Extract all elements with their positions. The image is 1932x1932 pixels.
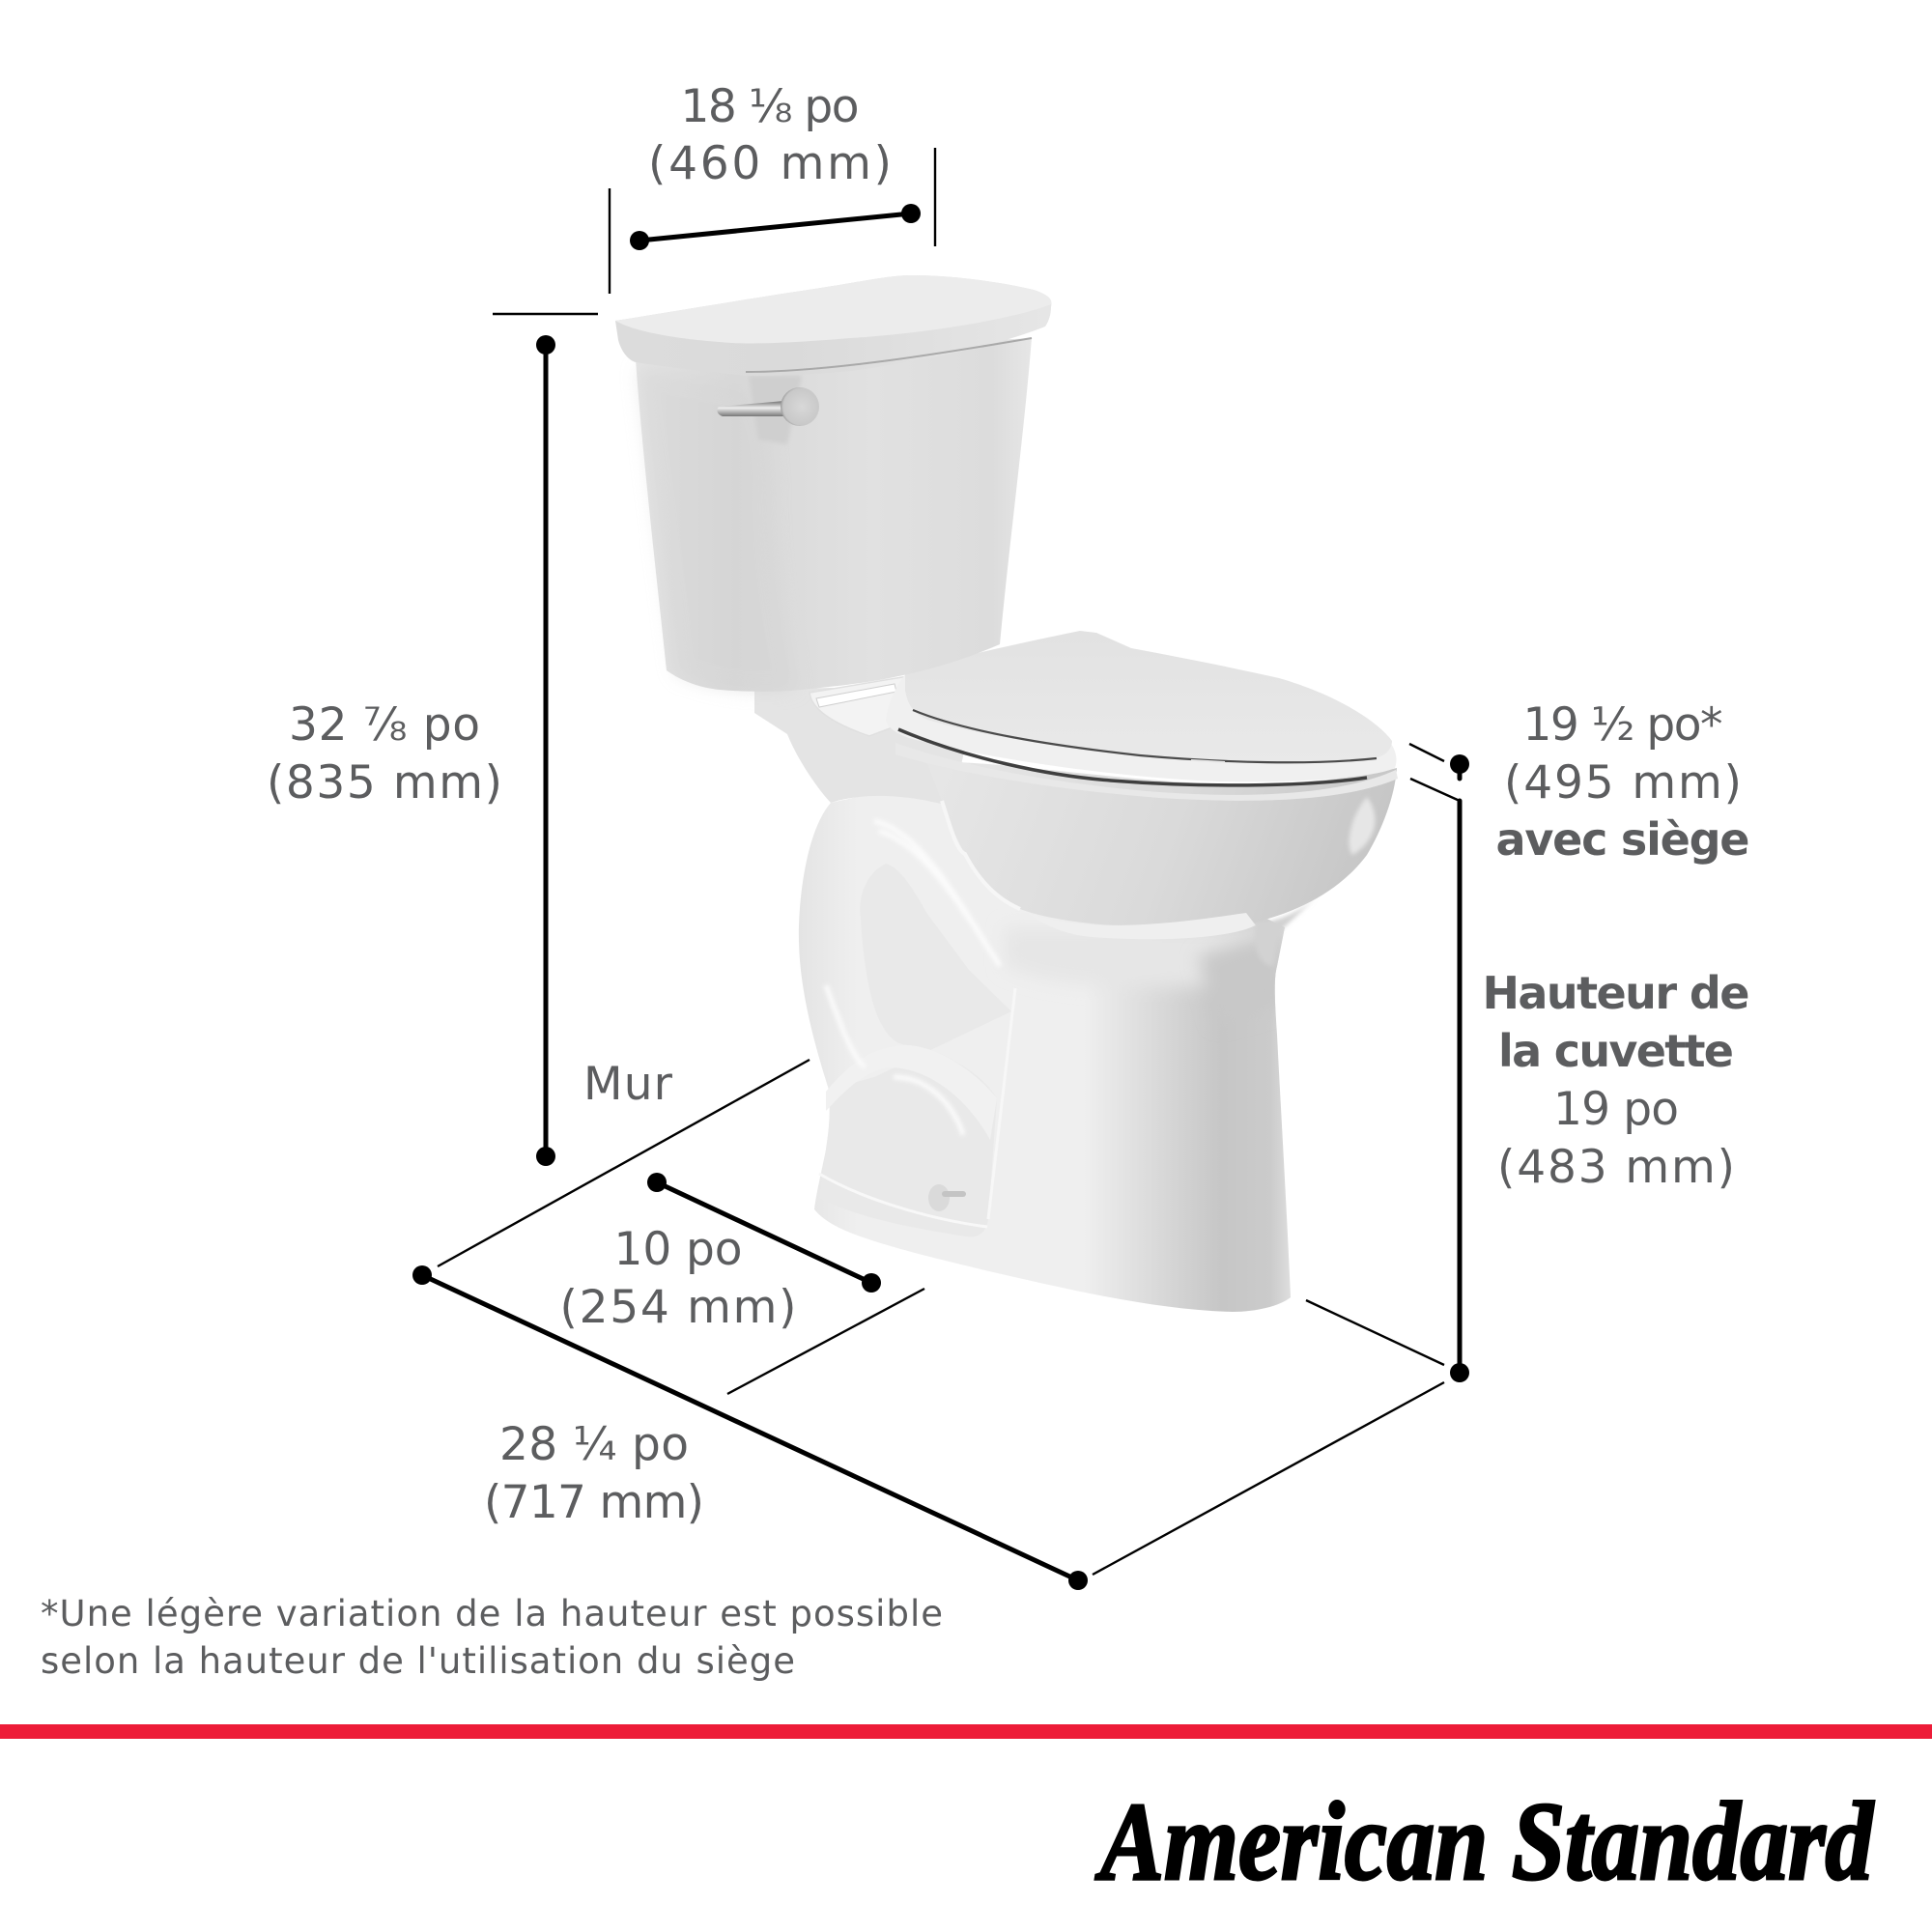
label: bowl height: la cuvette bbox=[1498, 1025, 1734, 1077]
tank body bbox=[636, 338, 1032, 692]
label: total height: (835 mm) bbox=[267, 756, 502, 810]
footnote: *Une légère variation de la hauteur est possible bbox=[41, 1593, 943, 1634]
label: height with seat: (495 mm) bbox=[1504, 756, 1742, 810]
bolt cap bbox=[928, 1184, 966, 1211]
label: overall depth: 28 ¼ po bbox=[499, 1418, 689, 1471]
dimension: bowl height bbox=[1409, 744, 1469, 1382]
label: overall depth: (717 mm) bbox=[484, 1476, 704, 1529]
seat lid bbox=[905, 631, 1392, 762]
trap recess bbox=[819, 864, 1011, 1236]
label: rough-in bbox=[560, 1223, 796, 1334]
label: bowl height: Hauteur de bbox=[1482, 967, 1750, 1019]
toilet illustration bbox=[615, 275, 1398, 1312]
label: height with seat: avec siège bbox=[1495, 813, 1750, 866]
dimension: rough-in bbox=[647, 1173, 924, 1394]
footnote: selon la hauteur de l'utilisation du siège bbox=[41, 1640, 795, 1682]
label: rough-in: (254 mm) bbox=[560, 1281, 796, 1334]
label: total height bbox=[267, 698, 502, 810]
seat ring and rim bbox=[886, 671, 1398, 801]
label: wall: Mur bbox=[583, 1058, 673, 1111]
label: overall depth bbox=[484, 1418, 704, 1529]
red divider bbox=[0, 1724, 1932, 1739]
label: tank width bbox=[648, 80, 892, 190]
dimension: total height bbox=[493, 314, 598, 1166]
label: height with seat: 19 ½ po* bbox=[1522, 698, 1723, 752]
label: bowl height: (483 mm) bbox=[1497, 1141, 1735, 1194]
dimension: tank width bbox=[610, 148, 935, 294]
footnote bbox=[41, 1593, 943, 1682]
label: tank width: 18 ⅛ po bbox=[680, 80, 860, 133]
label: bowl height bbox=[1482, 967, 1750, 1194]
bowl bbox=[927, 762, 1397, 966]
label: tank width: (460 mm) bbox=[648, 137, 892, 190]
label: height with seat bbox=[1495, 698, 1750, 866]
tank neck and spud bbox=[754, 676, 966, 807]
dimension: overall depth bbox=[412, 1060, 1444, 1590]
label: bowl height: 19 po bbox=[1553, 1083, 1679, 1136]
flush lever bbox=[717, 387, 819, 426]
tank lid bbox=[615, 275, 1051, 376]
label: total height: 32 ⅞ po bbox=[289, 698, 480, 752]
label: rough-in: 10 po bbox=[614, 1223, 742, 1276]
pedestal and trapway bbox=[799, 773, 1291, 1312]
